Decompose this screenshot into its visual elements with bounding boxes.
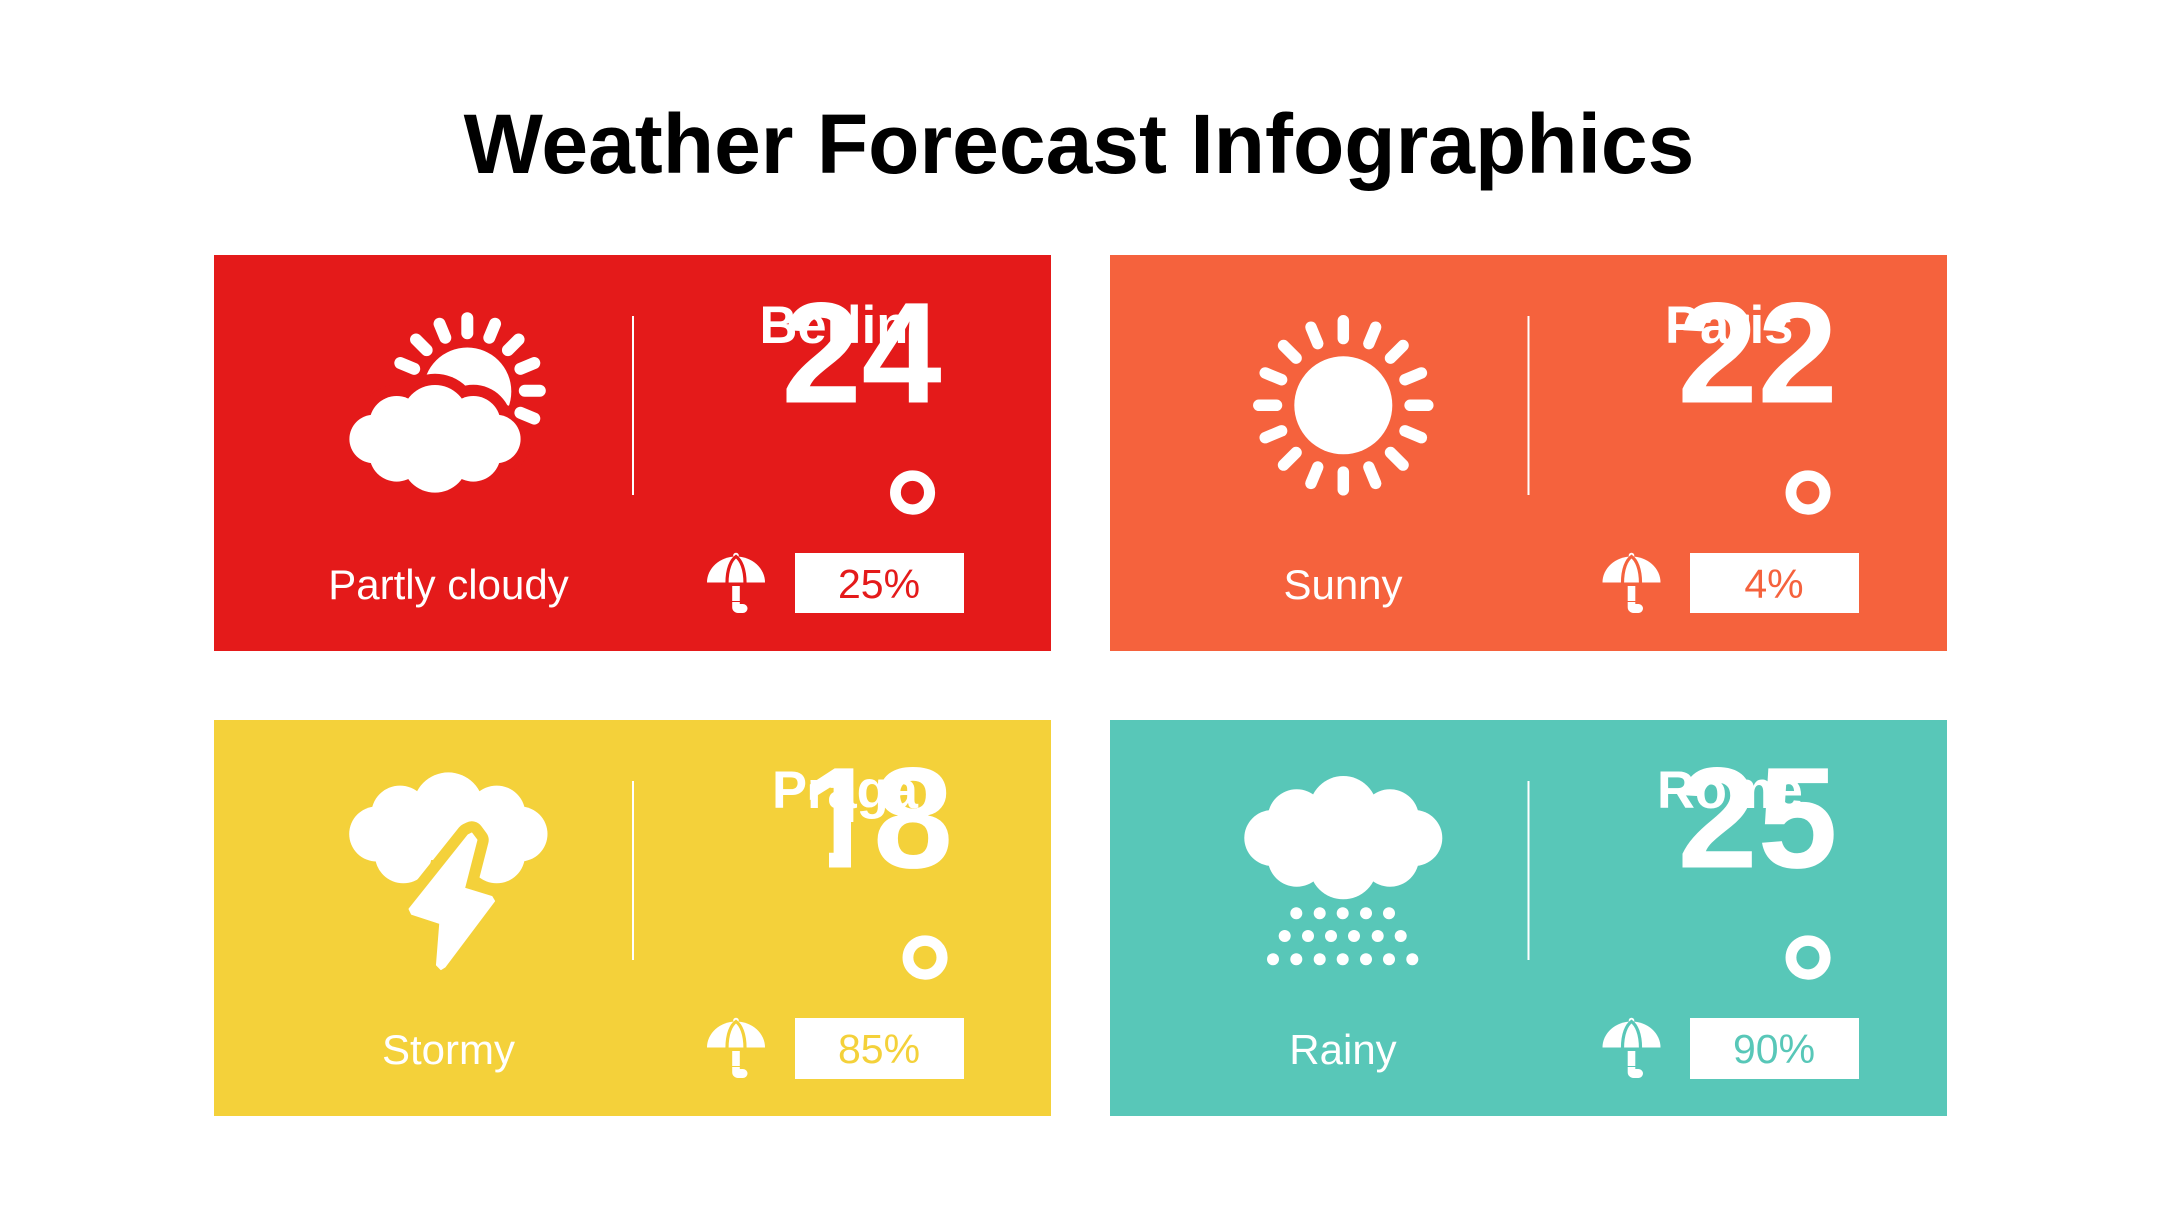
rain chance badge: [795, 1018, 964, 1079]
city name: Praga: [772, 761, 919, 820]
rain chance badge: [1690, 1018, 1859, 1079]
condition label: Sunny: [1283, 561, 1403, 608]
temperature: 22: [1678, 272, 1838, 434]
icon: sun: [1259, 321, 1428, 490]
temperature: 24: [782, 272, 942, 434]
panel: Rome: [1110, 720, 1947, 1116]
condition label: Partly cloudy: [328, 561, 569, 608]
icon: umbrella: [1602, 1018, 1660, 1078]
icon: storm cloud with lightning: [349, 772, 548, 969]
city name: Paris: [1665, 296, 1793, 355]
title: Weather Forecast Infographics: [464, 97, 1694, 191]
panel: Paris: [1110, 255, 1947, 651]
icon: umbrella: [707, 553, 765, 613]
rain chance badge: [795, 553, 964, 613]
rain chance badge: 25%: [838, 561, 920, 607]
rain chance badge: 85%: [838, 1026, 920, 1072]
rain chance badge: 4%: [1744, 561, 1804, 607]
icon: umbrella: [707, 1018, 765, 1078]
degree symbol: °: [1779, 906, 1837, 1067]
rain chance badge: [1690, 553, 1859, 613]
temperature: 25: [1678, 738, 1838, 898]
city name: Rome: [1657, 761, 1803, 820]
panel: Praga: [214, 720, 1051, 1116]
icon: rain cloud: [1244, 776, 1442, 965]
degree symbol: °: [896, 906, 954, 1067]
icon: partly cloudy: [349, 318, 540, 493]
degree symbol: °: [1779, 441, 1837, 602]
rain chance badge: 90%: [1733, 1026, 1815, 1072]
condition label: Stormy: [382, 1026, 515, 1073]
condition label: Rainy: [1289, 1026, 1397, 1073]
temperature: 18: [800, 738, 953, 898]
degree symbol: °: [884, 441, 941, 602]
icon: umbrella: [1602, 553, 1660, 613]
panel: Berlin: [214, 255, 1051, 651]
city name: Berlin: [760, 296, 908, 355]
